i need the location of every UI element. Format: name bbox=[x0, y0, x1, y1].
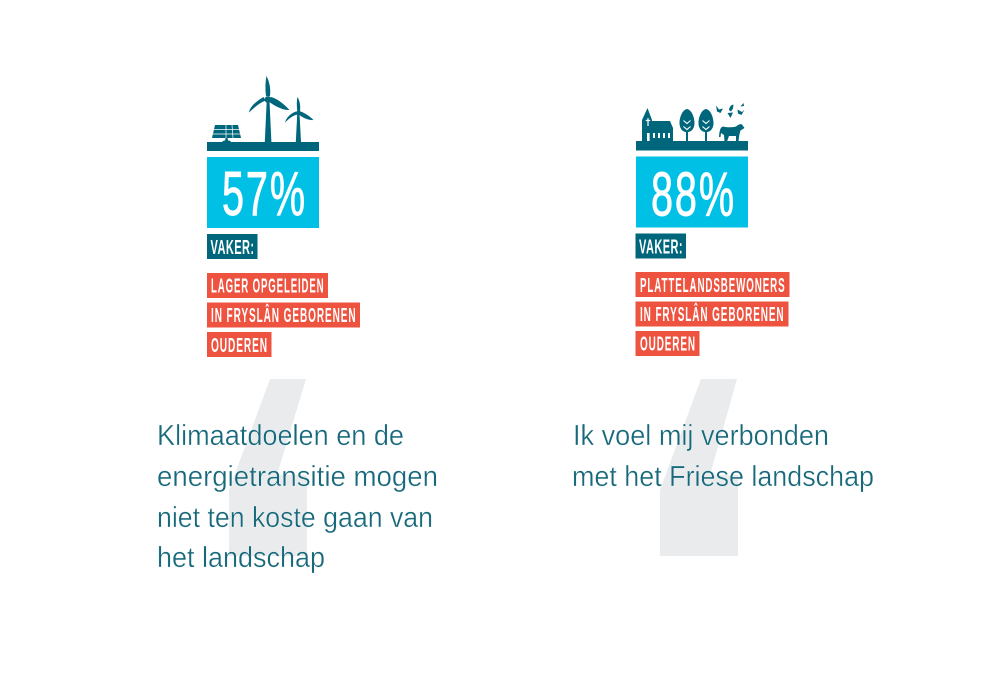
quote mark: left bbox=[229, 379, 307, 556]
panel: left statistic bbox=[207, 76, 360, 357]
percentage box bbox=[207, 157, 319, 229]
tag: in fryslan geboren bbox=[636, 302, 788, 326]
text: left statement: het landschap bbox=[157, 542, 325, 574]
tag: in fryslan geboren: IN FRYSLÂN GEBORENEN bbox=[640, 302, 784, 326]
tag: lager opgeleiden bbox=[207, 273, 328, 298]
tag: plattelandsbewoners bbox=[636, 272, 790, 297]
text: left statement bbox=[157, 420, 438, 574]
label: vaker bbox=[207, 234, 258, 259]
text: left statement: energietransitie mogen bbox=[157, 461, 438, 493]
text: right statement: met het Friese landschap bbox=[572, 461, 874, 493]
tag: plattelandsbewoners: PLATTELANDSBEWONERS bbox=[640, 275, 786, 297]
text: right statement: Ik voel mij verbonden bbox=[573, 420, 829, 452]
text: left statement: Klimaatdoelen en de bbox=[157, 420, 404, 452]
tag: in fryslan geboren bbox=[207, 302, 360, 328]
text: left statement: niet ten koste gaan van bbox=[157, 502, 433, 534]
label: vaker bbox=[636, 234, 686, 258]
percentage box bbox=[636, 156, 748, 230]
tag: ouderen: OUDEREN bbox=[640, 334, 696, 356]
icon: solar panel and wind turbines bbox=[207, 76, 319, 151]
icon: church, trees, cow and birds bbox=[636, 103, 748, 150]
percentage box: 57% bbox=[222, 160, 307, 229]
panel: right statistic bbox=[636, 103, 790, 356]
tag: in fryslan geboren: IN FRYSLÂN GEBORENEN bbox=[211, 303, 356, 327]
tag: ouderen: OUDEREN bbox=[211, 335, 268, 357]
tag: ouderen bbox=[636, 331, 700, 356]
label: vaker: VAKER: bbox=[639, 236, 683, 258]
text: right statement bbox=[572, 420, 874, 493]
percentage box: 88% bbox=[651, 160, 736, 230]
panel: left statistic: LAGER OPGELEIDEN bbox=[211, 276, 324, 298]
tag: ouderen bbox=[207, 332, 272, 357]
quote mark: right bbox=[660, 379, 738, 556]
label: vaker: VAKER: bbox=[210, 236, 254, 259]
